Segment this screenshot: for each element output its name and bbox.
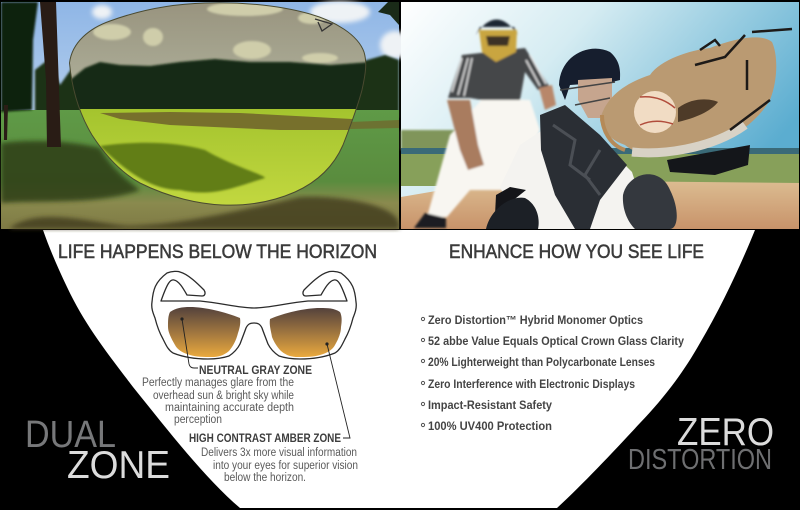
photo: golf course through lens bbox=[1, 0, 410, 229]
fairway bbox=[1, 110, 399, 229]
logo text: dual zone: DUAL bbox=[25, 414, 116, 456]
chest protector bbox=[540, 105, 627, 229]
label: neutral gray zone: NEUTRAL GRAY ZONE bbox=[199, 363, 312, 377]
logo text: zero distortion bbox=[628, 411, 774, 476]
right lens bbox=[270, 308, 342, 357]
feature: lighterweight: 20% Lighterweight than Polycarbonate Lenses bbox=[428, 357, 655, 369]
logo text: zero distortion: ZERO bbox=[677, 411, 774, 454]
logo text: dual zone bbox=[25, 414, 170, 487]
icon: lens logo bbox=[315, 19, 332, 31]
sky clouds bbox=[92, 1, 410, 59]
feature: abbe value: 52 abbe Value Equals Optical Crown Glass Clarity bbox=[428, 336, 685, 348]
glove lacing bbox=[695, 29, 792, 130]
white curved panel bbox=[43, 230, 755, 508]
top right branch bbox=[378, 2, 399, 25]
callout line: high contrast amber zone bbox=[327, 344, 350, 438]
tree line bbox=[35, 55, 399, 118]
shadow on grass bbox=[1, 141, 140, 203]
text: neutral gray zone description: Perfectly manages glare from the bbox=[142, 377, 294, 389]
baseball bbox=[634, 91, 676, 133]
lens pond bbox=[100, 112, 370, 130]
text: amber zone description: into your eyes for superior vision bbox=[213, 460, 358, 472]
feature: uv400: 100% UV400 Protection bbox=[428, 421, 552, 433]
catcher body bbox=[500, 125, 650, 229]
text: amber zone description: Delivers 3x more visual information bbox=[201, 447, 357, 459]
umpire bbox=[414, 20, 556, 228]
lens shadow bbox=[100, 143, 265, 193]
label: high contrast amber zone: HIGH CONTRAST AMBER ZONE bbox=[189, 432, 341, 445]
lens overlay bbox=[70, 3, 366, 205]
photo: baseball catcher bbox=[401, 2, 799, 229]
feature: impact resistant: Impact-Resistant Safety bbox=[428, 400, 553, 412]
text: neutral gray zone description: maintaining accurate depth bbox=[165, 402, 294, 414]
text: neutral gray zone description bbox=[142, 377, 294, 426]
logo text: dual zone: ZONE bbox=[67, 444, 170, 487]
glove bbox=[600, 37, 776, 155]
frame outline bbox=[152, 271, 356, 359]
text: neutral gray zone description: overhead sun & bright sky while bbox=[153, 390, 294, 402]
feature: zero interference: Zero Interference with Electronic Displays bbox=[428, 379, 635, 391]
heading: life happens below the horizon: LIFE HAPPENS BELOW THE HORIZON bbox=[58, 241, 377, 263]
text: amber zone description: below the horizon. bbox=[224, 472, 306, 484]
foreground tree left bbox=[1, 2, 38, 112]
outfield and dirt bbox=[401, 130, 526, 150]
feature: hybrid monomer optics: Zero Distortion™ Hybrid Monomer Optics bbox=[428, 315, 643, 327]
heading: enhance how you see life: ENHANCE HOW YOU SEE LIFE bbox=[449, 241, 704, 263]
callout line: neutral gray zone bbox=[182, 319, 198, 368]
catcher helmet bbox=[559, 49, 620, 100]
illustration: dual zone sunglasses bbox=[152, 271, 356, 359]
lens outline bbox=[70, 3, 366, 205]
text: amber zone description bbox=[201, 447, 358, 484]
leg guards bbox=[495, 187, 526, 215]
text: neutral gray zone description: perception bbox=[174, 414, 222, 426]
pond outside lens bbox=[350, 120, 399, 129]
left lens bbox=[168, 307, 240, 357]
feature list bbox=[421, 315, 685, 433]
